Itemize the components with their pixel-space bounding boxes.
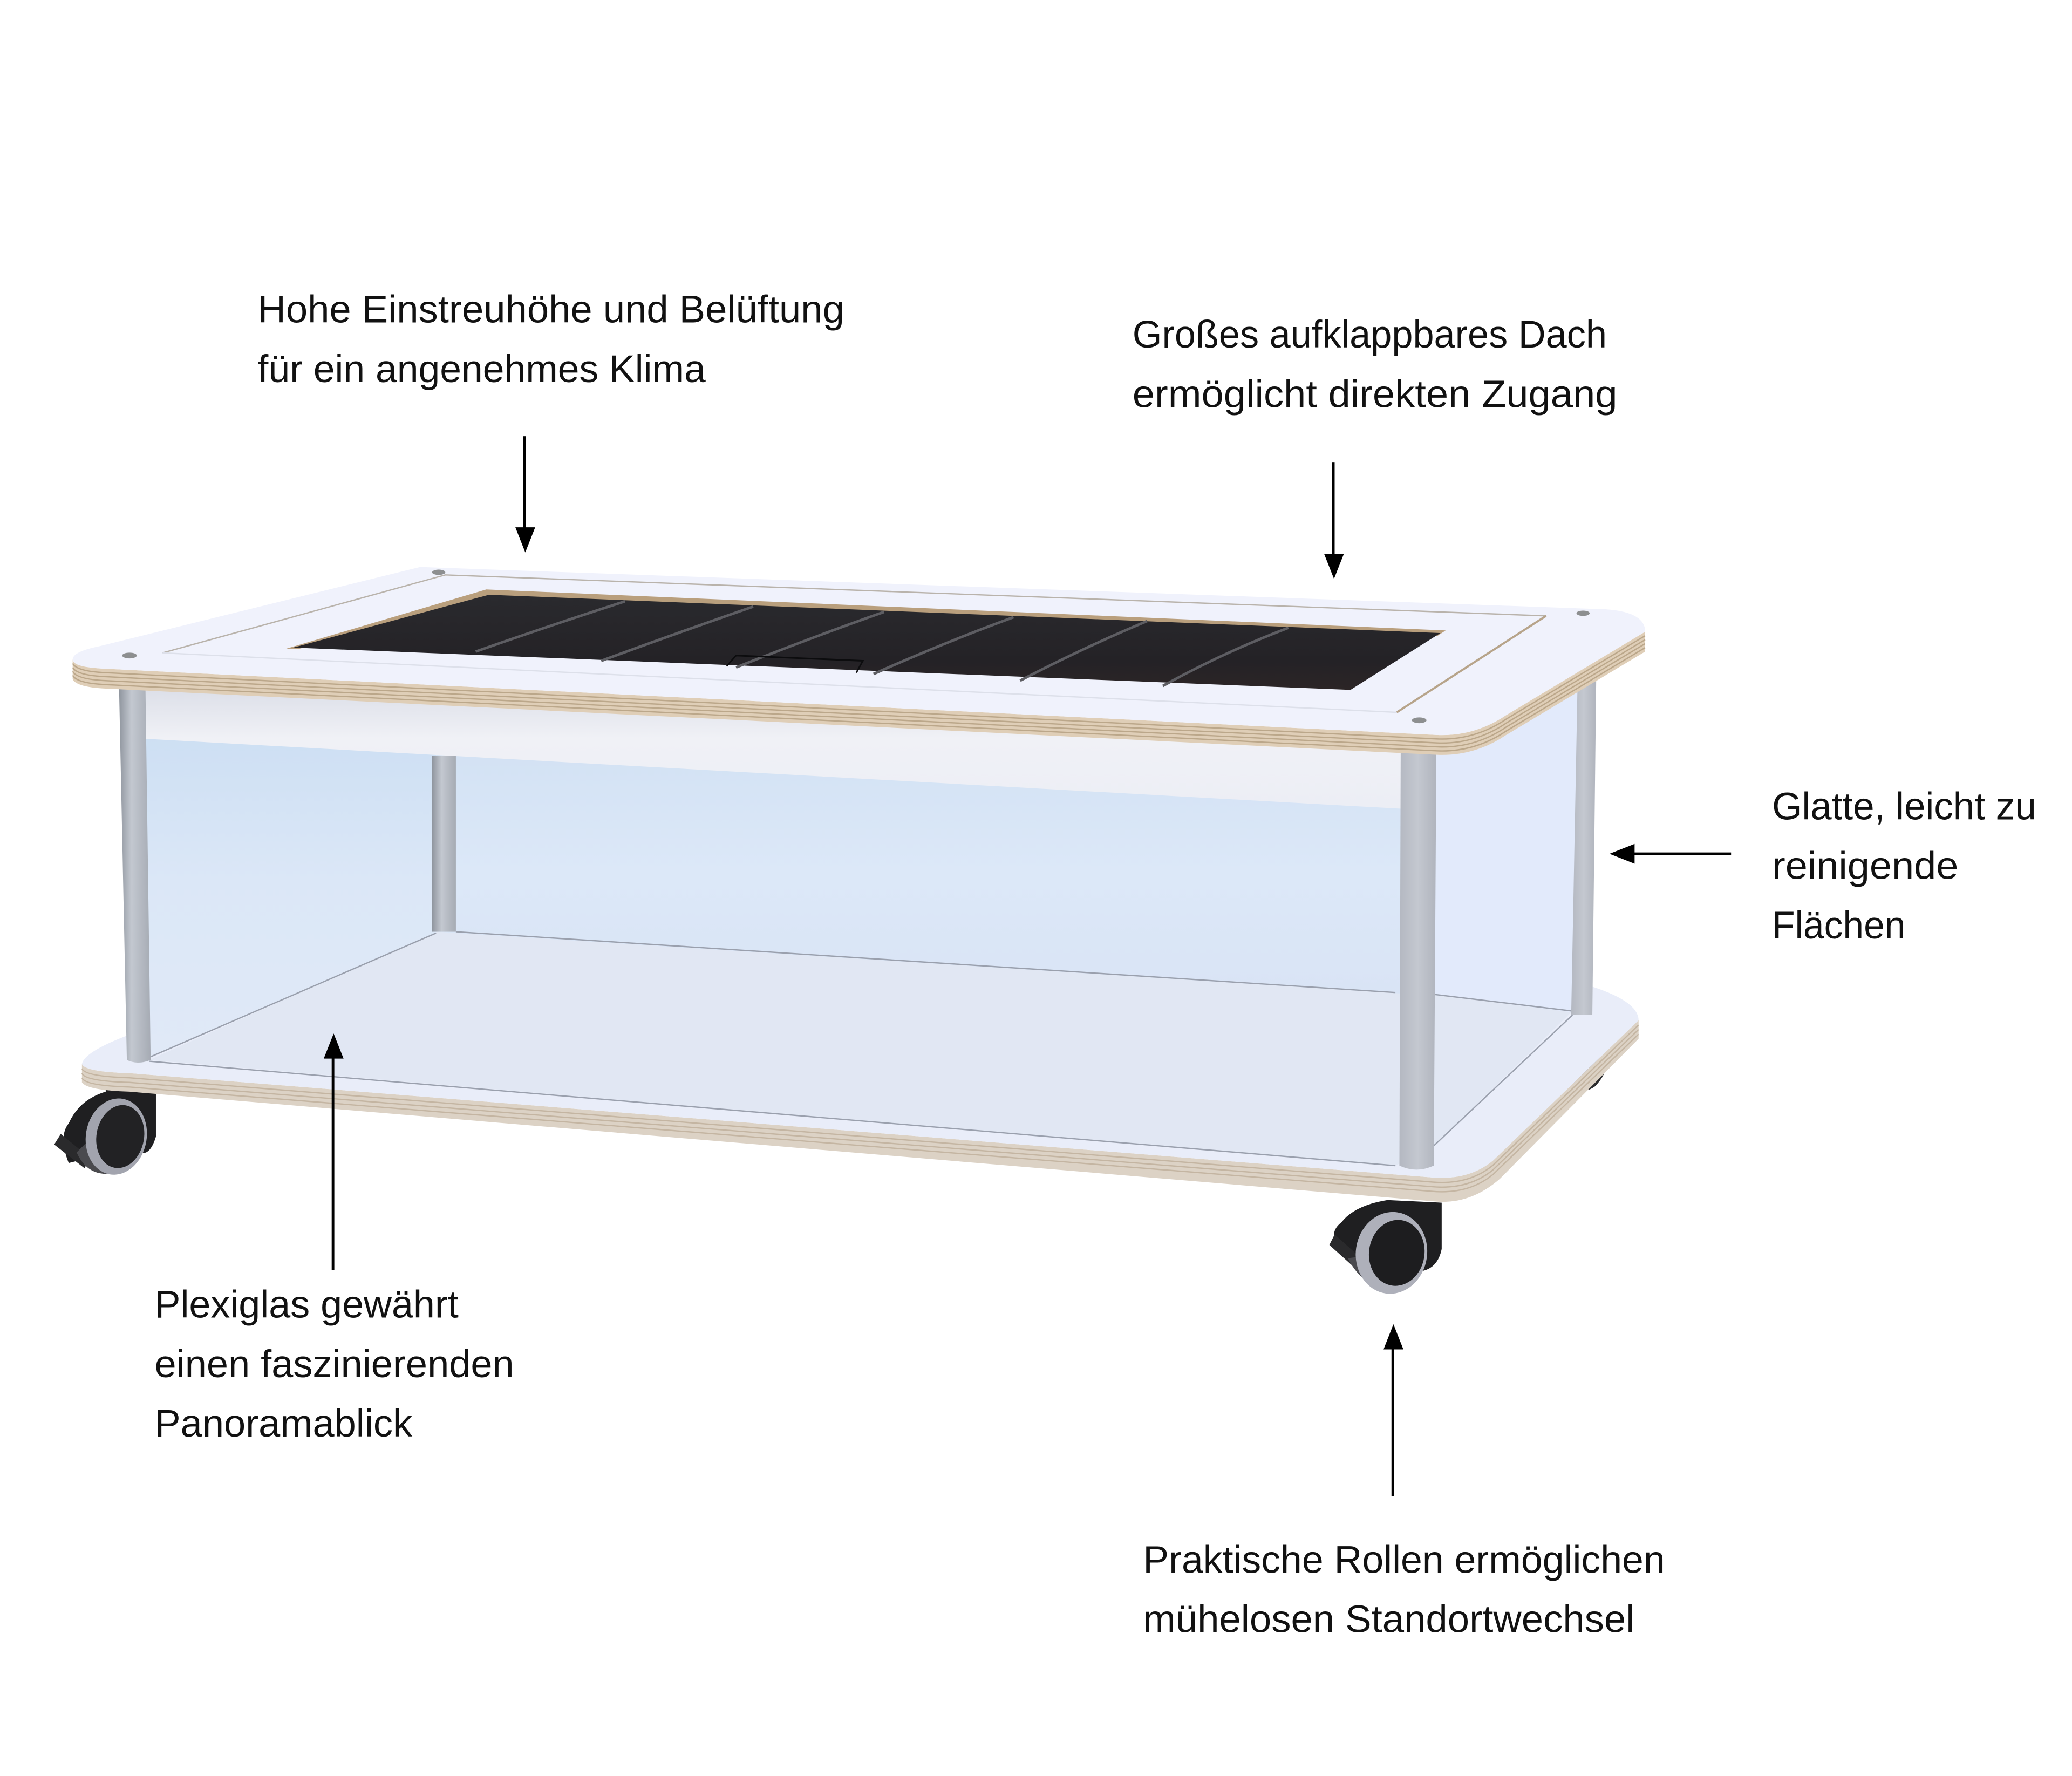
leg: front right xyxy=(1399,747,1436,1169)
arrow: plexiglass xyxy=(324,1033,344,1270)
leg: back right xyxy=(1571,671,1596,1015)
top board surface xyxy=(73,567,1645,735)
text: surfaces: Glatte, leicht zu xyxy=(1772,785,2036,828)
leg: back left xyxy=(432,756,456,932)
leg: front left xyxy=(119,681,151,1063)
roof seams xyxy=(162,575,1546,712)
arrow: roof ventilation xyxy=(515,436,535,553)
wire handle xyxy=(727,656,863,673)
text: surfaces xyxy=(1772,785,2036,947)
text: surfaces: Flächen xyxy=(1772,904,1905,947)
caster: front right xyxy=(1330,1200,1442,1298)
text: casters: Praktische Rollen ermöglichen xyxy=(1143,1539,1665,1581)
floor inside enclosure xyxy=(149,932,1572,1166)
glass pane: right side xyxy=(1430,677,1580,1012)
arrow: smooth surfaces xyxy=(1610,844,1731,863)
bottom board surface xyxy=(82,912,1639,1178)
text: roof: ermöglicht direkten Zugang xyxy=(1133,373,1618,416)
glass pane: left side xyxy=(145,733,436,1057)
text: plexiglass: Panoramablick xyxy=(155,1403,413,1445)
top board edge: plywood xyxy=(73,632,1645,755)
text: surfaces: reinigende xyxy=(1772,845,1958,888)
text: plexiglass: einen faszinierenden xyxy=(155,1343,514,1386)
text: plexiglass xyxy=(155,1284,514,1445)
text: ventilation xyxy=(258,289,844,391)
product: terrarium table on casters xyxy=(54,567,1645,1298)
text: ventilation: Hohe Einstreuhöhe und Belüftung xyxy=(258,289,844,331)
text: casters: mühelosen Standortwechsel xyxy=(1143,1598,1634,1641)
floor edge lines xyxy=(149,932,1572,1166)
text: roof xyxy=(1133,314,1618,416)
caster: back right xyxy=(1570,1057,1607,1091)
glass pane: back xyxy=(436,753,1406,994)
text: roof: Großes aufklappbares Dach xyxy=(1133,314,1607,356)
arrow: roof access xyxy=(1324,462,1344,579)
arrow: casters xyxy=(1383,1324,1403,1496)
screws xyxy=(122,570,1590,723)
apron under top xyxy=(145,681,1403,809)
bottom board edge: plywood xyxy=(82,1020,1639,1202)
mat ribs xyxy=(476,601,1289,686)
text: plexiglass: Plexiglas gewährt xyxy=(155,1284,459,1326)
text: casters xyxy=(1143,1539,1665,1641)
caster: front left xyxy=(54,1084,156,1180)
roof window with rubber mat xyxy=(285,589,1446,690)
text: ventilation: für ein angenehmes Klima xyxy=(258,348,706,391)
